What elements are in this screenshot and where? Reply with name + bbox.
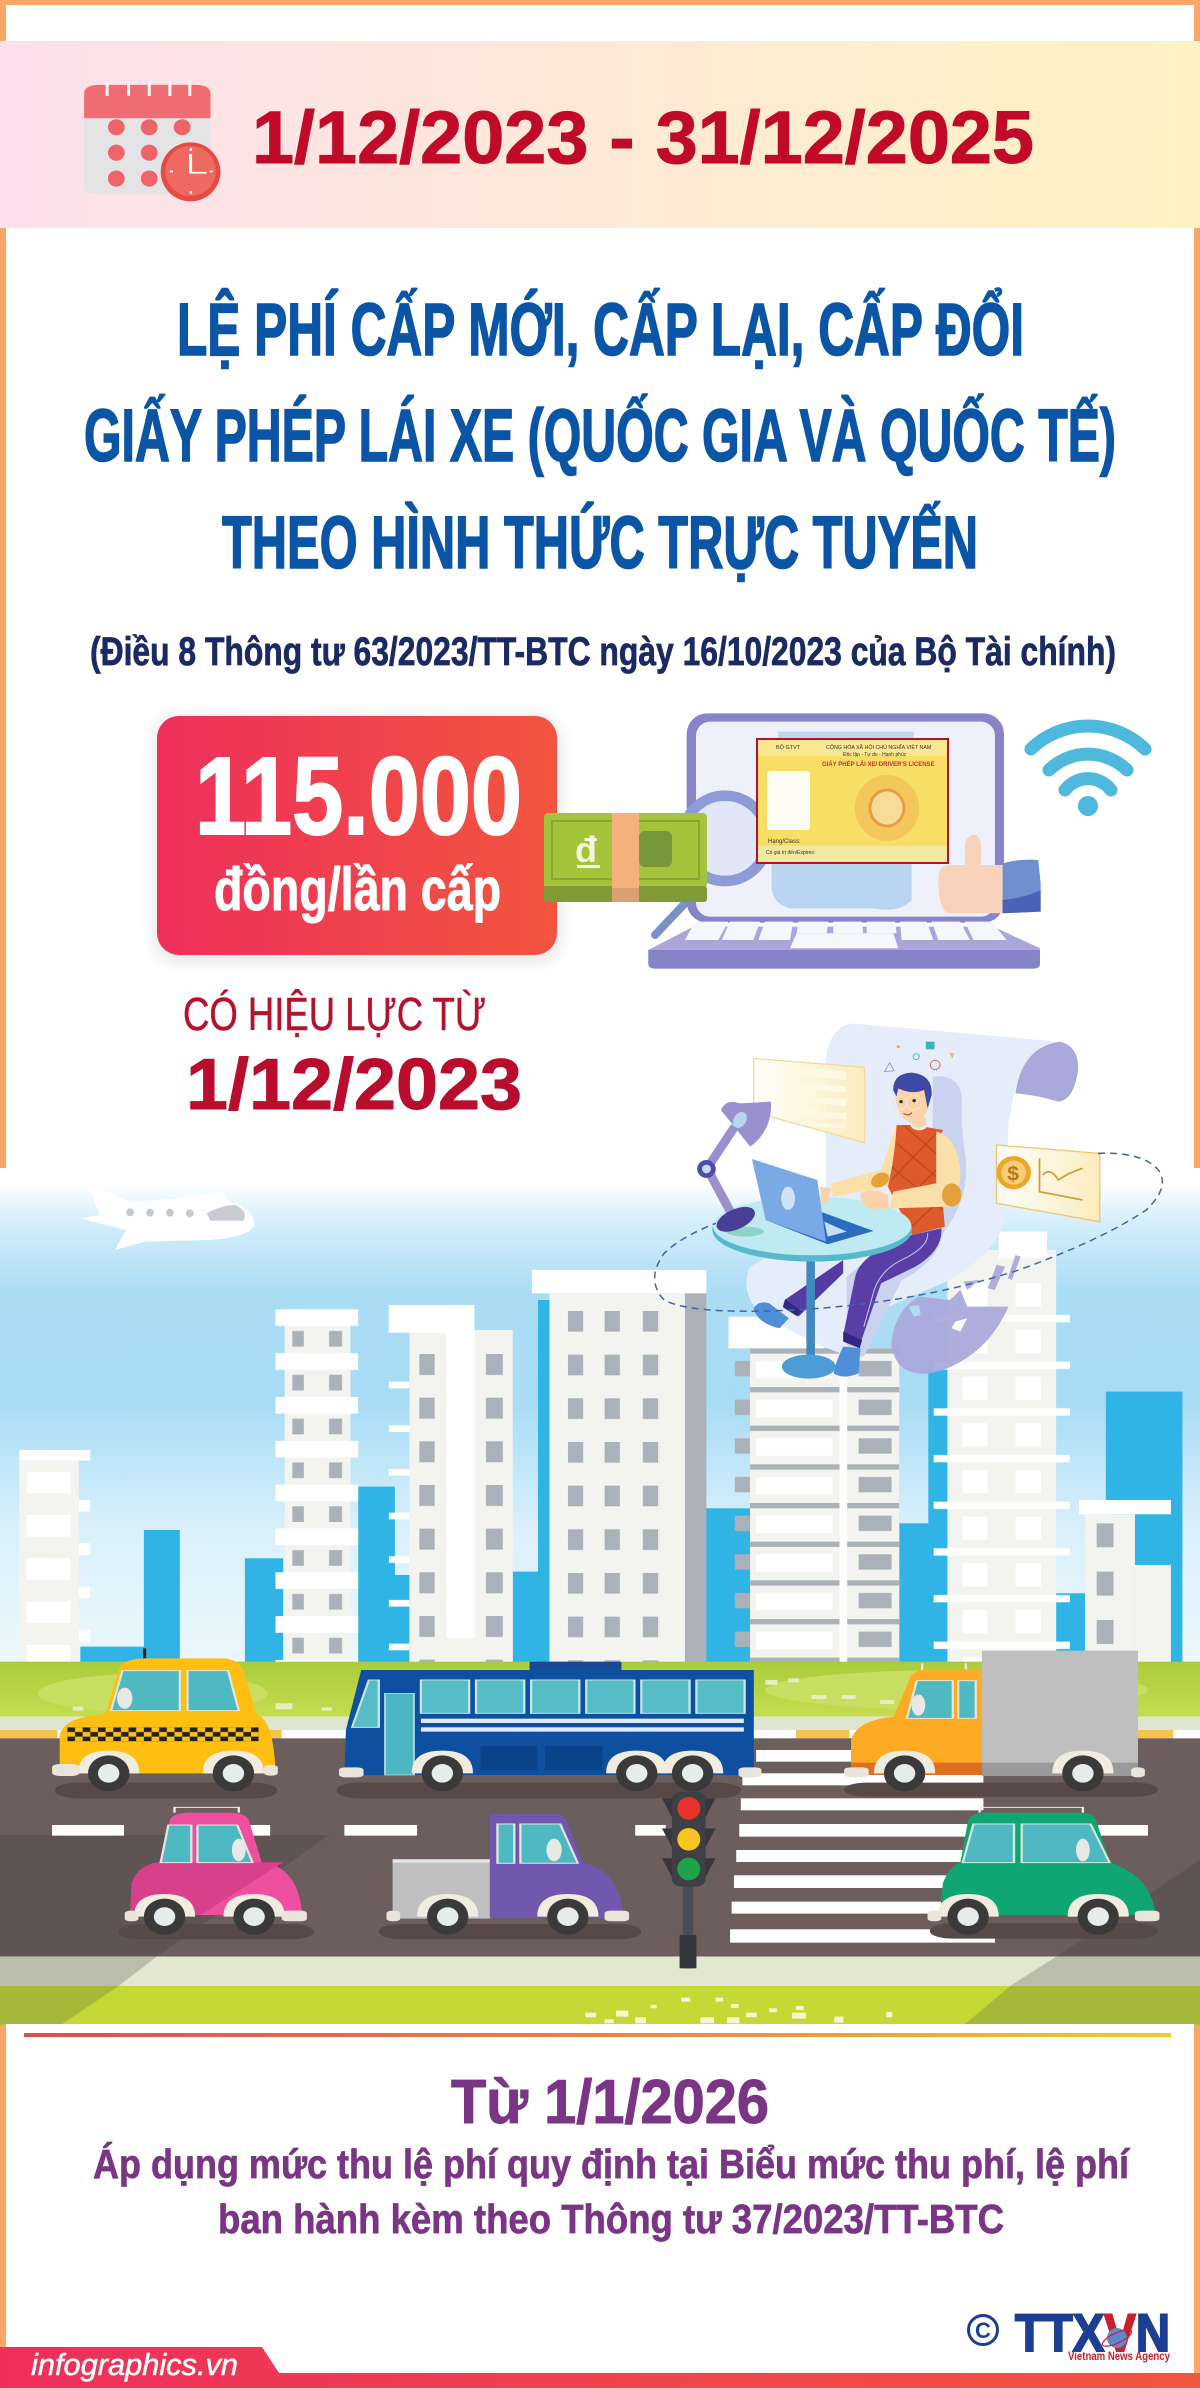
building B <box>276 1309 358 1663</box>
building C <box>389 1305 513 1663</box>
building D <box>532 1270 706 1663</box>
person <box>754 1073 961 1377</box>
buildings <box>19 1232 1182 1663</box>
effective date: 1/12/2023 <box>186 1045 522 1125</box>
driving licence card: Hạng/Class: <box>768 839 801 845</box>
traffic light <box>662 1792 716 1968</box>
magnifier <box>655 796 768 935</box>
website label: infographics.vn <box>31 2347 238 2382</box>
round table and laptop <box>712 1159 912 1379</box>
icon: wifi <box>1031 726 1145 816</box>
illustration: laptop with driving licence <box>648 713 1041 969</box>
thumbs up hand <box>938 835 1041 913</box>
floating panel right: $ <box>1007 1163 1019 1186</box>
fee unit: đồng/lần cấp <box>214 856 501 923</box>
icon: banknote bundle <box>544 813 707 902</box>
sky and city background <box>0 1168 1200 1668</box>
building F <box>934 1232 1070 1663</box>
plane <box>80 1183 254 1250</box>
illustration: person working online <box>655 1023 1162 1379</box>
building E <box>729 1317 899 1663</box>
icon: banknote bundle: đ <box>575 829 597 870</box>
driving licence card: GIẤY PHÉP LÁI XE/ DRIVER'S LICENSE <box>822 760 935 768</box>
paper scroll <box>746 1023 1078 1374</box>
note body <box>93 2141 1130 2242</box>
date range: 1/12/2023 - 31/12/2025 <box>252 96 1034 179</box>
effective date <box>183 988 522 1125</box>
bottom white panel <box>6 2024 1194 2374</box>
street scene <box>0 1648 1200 2025</box>
logo: TTXVN: C <box>975 2318 991 2343</box>
date banner <box>0 41 1200 228</box>
laptop screen <box>687 713 1004 923</box>
gradient divider <box>24 2033 1171 2037</box>
icon: calendar with clock <box>84 82 220 201</box>
note body: ban hành kèm theo Thông tư 37/2023/TT-BTC <box>218 2196 1004 2242</box>
car shadows <box>55 1783 1158 1939</box>
effective date: CÓ HIỆU LỰC TỪ <box>183 988 486 1040</box>
road markings <box>52 1750 1148 1943</box>
fee amount: 115.000 <box>195 735 522 858</box>
purple pickup <box>386 1814 629 1935</box>
taxi <box>52 1648 278 1791</box>
footer bar <box>0 2347 1200 2388</box>
fee box <box>152 714 562 964</box>
driving licence card: Độc lập - Tự do - Hạnh phúc <box>843 752 907 758</box>
driving licence card <box>757 739 948 863</box>
green car <box>928 1807 1159 1935</box>
floating panel left <box>754 1058 865 1143</box>
driving licence card: CỘNG HÒA XÃ HỘI CHỦ NGHĨA VIỆT NAM <box>826 743 931 751</box>
pink car <box>125 1807 307 1935</box>
note heading: Từ 1/1/2026 <box>451 2068 769 2137</box>
title <box>84 288 1116 584</box>
desk lamp <box>697 1102 771 1237</box>
building A <box>19 1450 90 1663</box>
grass and sidewalks <box>0 1662 1200 2025</box>
building G <box>1079 1500 1171 1663</box>
driving licence card: BỘ GTVT <box>776 744 801 751</box>
small decoration shapes <box>885 1042 954 1072</box>
dashed orbit <box>655 1153 1162 1311</box>
logo: TTXVN: Vietnam News Agency <box>1068 2349 1170 2363</box>
logo: TTXVN: TTXVN <box>1015 2304 1170 2363</box>
floating panel right <box>996 1145 1100 1222</box>
delivery truck <box>844 1651 1145 1791</box>
laptop keyboard <box>648 927 1040 969</box>
driving licence card: Có giá trị đến/Expires: <box>766 850 815 856</box>
bus <box>339 1662 761 1791</box>
